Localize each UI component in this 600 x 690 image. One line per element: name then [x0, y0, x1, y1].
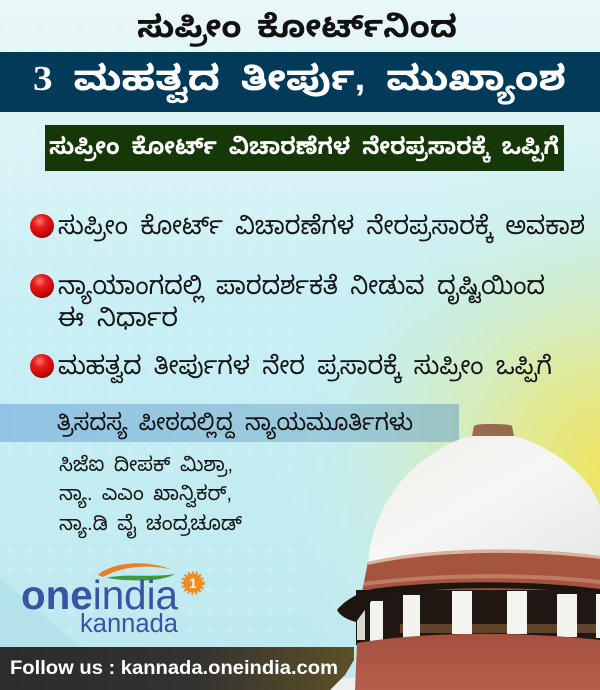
cornice	[337, 550, 600, 622]
logo badge: 1	[189, 575, 197, 591]
title banner: 3 ಮಹತ್ವದ ತೀರ್ಪು, ಮುಖ್ಯಾಂಶ	[33, 59, 566, 105]
judges names: ನ್ಯಾ.ಡಿ ವೈ ಚಂದ್ರಚೂಡ್	[59, 513, 243, 539]
footer bar: Follow us : kannada.oneindia.com	[10, 658, 338, 679]
finial	[472, 424, 514, 436]
bullet three: ಮಹತ್ವದ ತೀರ್ಪುಗಳ ನೇರ ಪ್ರಸಾರಕ್ಕೆ ಸುಪ್ರೀಂ ಒಪ್ಪಿಗೆ	[58, 352, 552, 384]
colonnade	[356, 590, 600, 645]
bench heading band: ತ್ರಿಸದಸ್ಯ ಪೀಠದಲ್ಲಿದ್ದ ನ್ಯಾಯಮೂರ್ತಿಗಳು	[57, 409, 413, 440]
bullet one: ಸುಪ್ರೀಂ ಕೋರ್ಟ್ ವಿಚಾರಣೆಗಳ ನೇರಪ್ರಸಾರಕ್ಕೆ ಅವಕಾಶ	[58, 212, 585, 244]
logo wordmark: oneindia	[21, 572, 178, 618]
bullet list	[30, 212, 585, 384]
brick drum	[362, 550, 600, 592]
title line one: ಸುಪ್ರೀಂ ಕೋರ್ಟ್‌ನಿಂದ	[137, 9, 457, 47]
title banner	[0, 52, 600, 112]
judges names: ನ್ಯಾ. ಎಎಂ ಖಾನ್ವಿಕರ್,	[59, 483, 232, 509]
logo kannada label: kannada	[80, 610, 179, 638]
oneindia kannada logo	[21, 563, 204, 638]
green subheading	[45, 125, 564, 171]
bullet two: ನ್ಯಾಯಾಂಗದಲ್ಲಿ ಪಾರದರ್ಶಕತೆ ನೀಡುವ ದೃಷ್ಟಿಯಿಂದ	[58, 272, 545, 305]
bullet two: ಈ ನಿರ್ಧಾರ	[58, 304, 178, 332]
dome	[368, 436, 600, 562]
brick wall	[355, 634, 600, 690]
lower small dome	[328, 678, 362, 690]
judges names: ಸಿಜೆಐ ದೀಪಕ್ ಮಿಶ್ರಾ,	[59, 454, 233, 477]
logo swoosh	[98, 563, 175, 581]
footer bar	[0, 647, 354, 690]
logo badge	[182, 572, 204, 594]
green subheading: ಸುಪ್ರೀಂ ಕೋರ್ಟ್ ವಿಚಾರಣೆಗಳ ನೇರಪ್ರಸಾರಕ್ಕೆ ಒಪ್ಪಿಗೆ	[49, 133, 559, 163]
judges names	[59, 454, 243, 539]
supreme court dome illustration	[328, 424, 600, 690]
bullet two	[30, 272, 545, 332]
bench heading band	[0, 404, 459, 442]
